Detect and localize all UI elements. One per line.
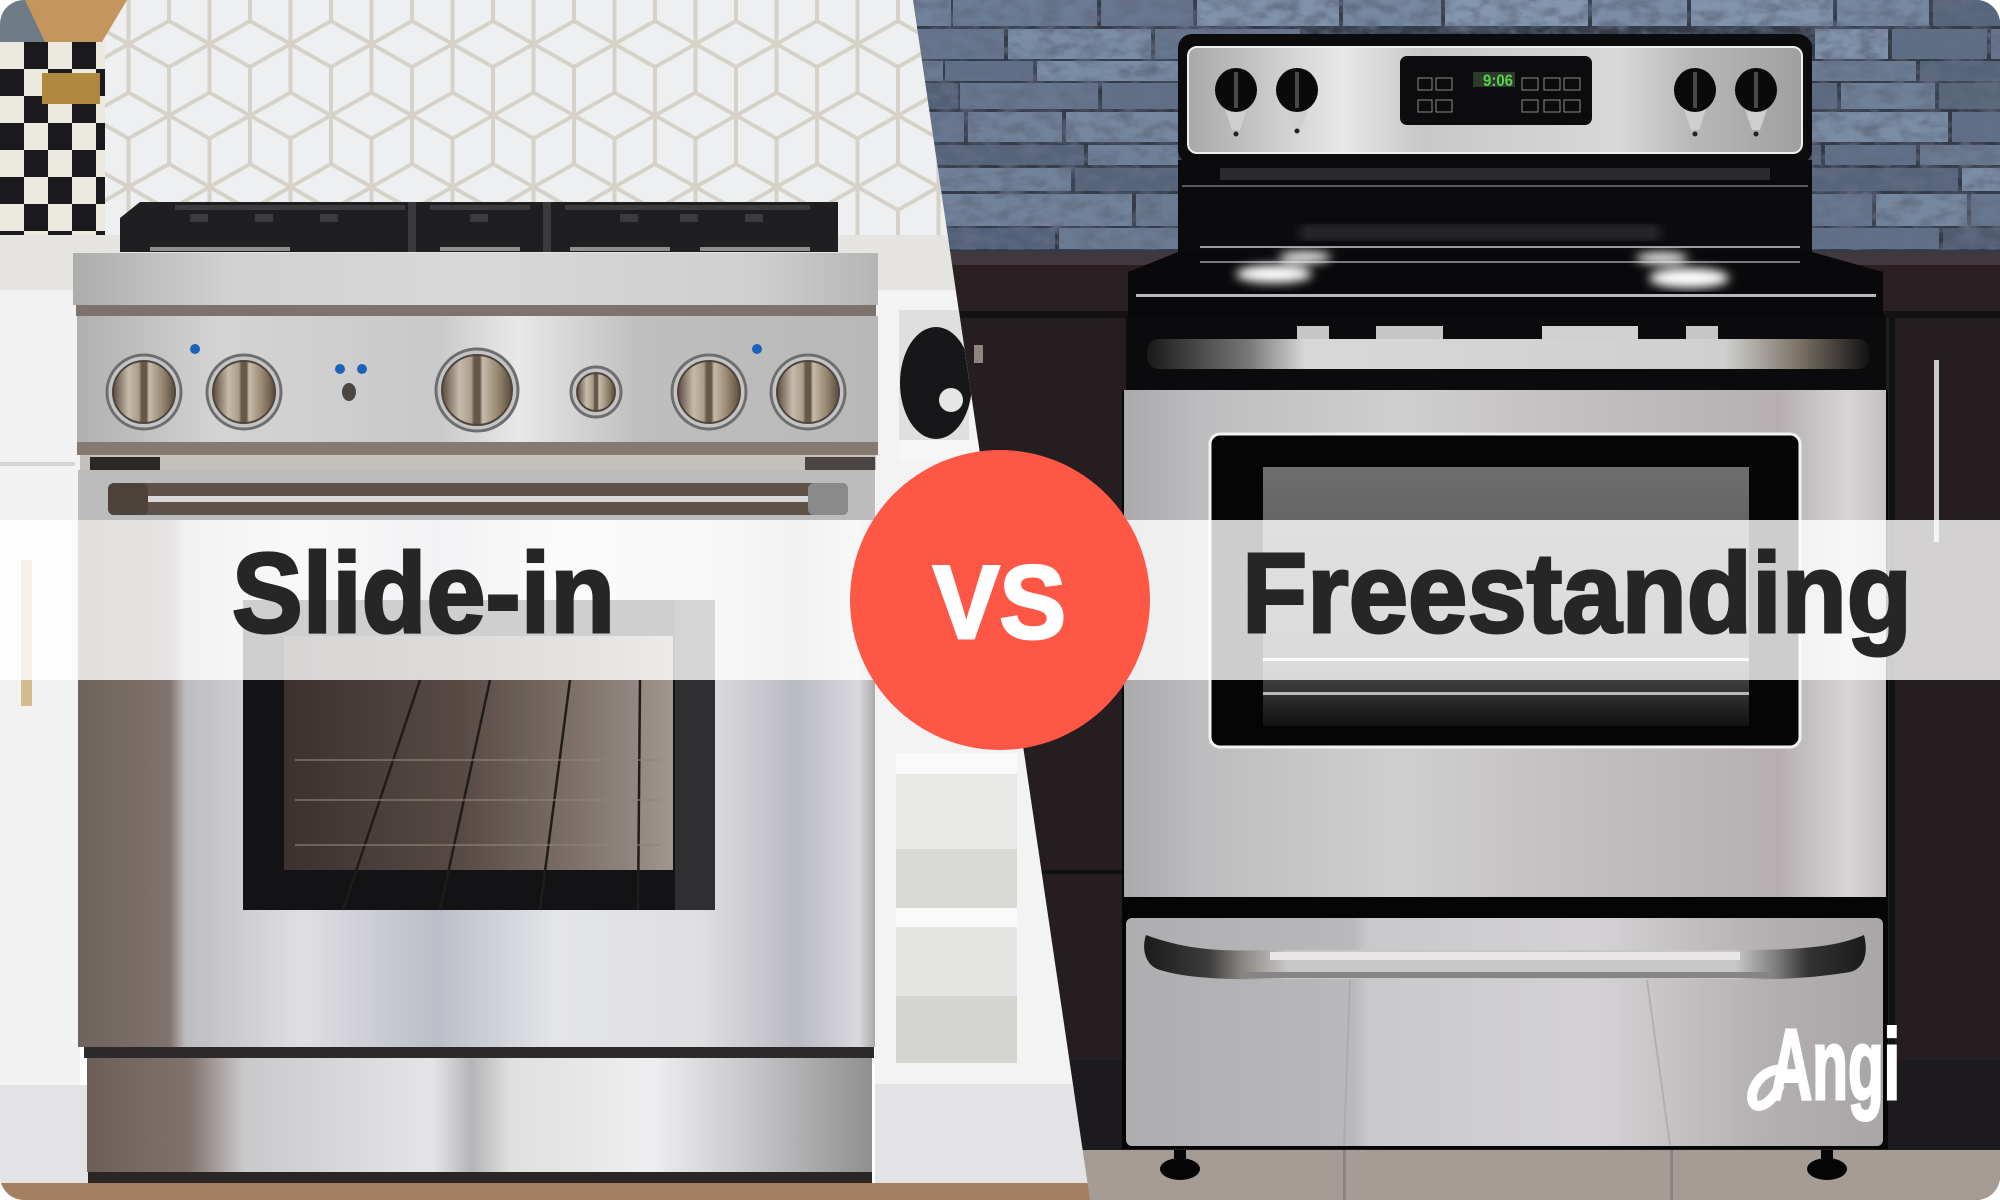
checkered utensil holder — [0, 42, 105, 237]
oven door — [78, 470, 875, 1047]
counter — [0, 235, 1000, 290]
lower slit — [84, 1047, 874, 1058]
burner knobs — [113, 355, 839, 425]
oven window — [243, 600, 715, 910]
wine bottle — [900, 327, 972, 439]
panel: slide-in kitchen scene — [0, 0, 1100, 1200]
tiled wall — [0, 0, 1000, 240]
digital display — [1400, 56, 1592, 125]
drawer handle — [1144, 935, 1866, 979]
door top rail — [78, 470, 875, 520]
door gap — [1124, 897, 1886, 919]
brown trim — [76, 305, 876, 316]
burner knob rings — [107, 349, 845, 431]
shelf unit — [875, 290, 1095, 1184]
indicator lights — [190, 344, 762, 374]
backguard — [1178, 34, 1812, 164]
oven door — [1124, 390, 1886, 897]
range side shadow — [1122, 390, 1888, 1149]
cooktop grates — [120, 202, 838, 252]
warming drawer — [87, 1058, 872, 1172]
corner shadow — [0, 0, 45, 42]
oven handle — [108, 483, 848, 515]
backguard — [73, 253, 878, 305]
toe kick — [1070, 1060, 2000, 1150]
control panel — [1188, 47, 1802, 153]
black splash — [1178, 160, 1812, 255]
upper cabinet fronts — [959, 311, 2000, 1044]
heading: Freestanding: Freestanding — [1242, 530, 1912, 656]
cabinet handle right — [1934, 360, 1939, 542]
heading: Slide-in: Slide-in — [232, 530, 615, 656]
cabinet handle — [974, 345, 983, 363]
cooktop — [1128, 246, 1883, 316]
VS badge — [850, 450, 1150, 750]
Angi logo: Angi — [1770, 1009, 1900, 1121]
front panel and lift-up strip — [1126, 316, 1886, 392]
countertop — [900, 252, 2000, 265]
panel: freestanding kitchen background — [900, 0, 2000, 1200]
freestanding range — [1122, 34, 1888, 1180]
clock digits: 9:06 — [1483, 71, 1513, 90]
oven feet — [1160, 1150, 1847, 1180]
Angi logo — [1752, 1009, 1900, 1121]
control panel — [77, 316, 878, 442]
vent slit — [80, 455, 876, 470]
VS badge: VS — [933, 545, 1066, 661]
knobs — [1215, 68, 1777, 136]
floor — [0, 1183, 1100, 1200]
oven window — [1210, 434, 1800, 747]
toggle switch — [342, 383, 356, 401]
floor — [1082, 1150, 2000, 1200]
slide-in range — [73, 202, 878, 1183]
cabinets — [0, 290, 90, 1185]
wooden spoons — [25, 0, 127, 42]
trim below panel — [77, 442, 878, 455]
toe gap — [88, 1172, 872, 1183]
brick backsplash — [900, 0, 2000, 252]
brass cabinet handle — [21, 560, 32, 706]
storage drawer — [1126, 918, 1883, 1146]
label band — [0, 520, 2000, 680]
